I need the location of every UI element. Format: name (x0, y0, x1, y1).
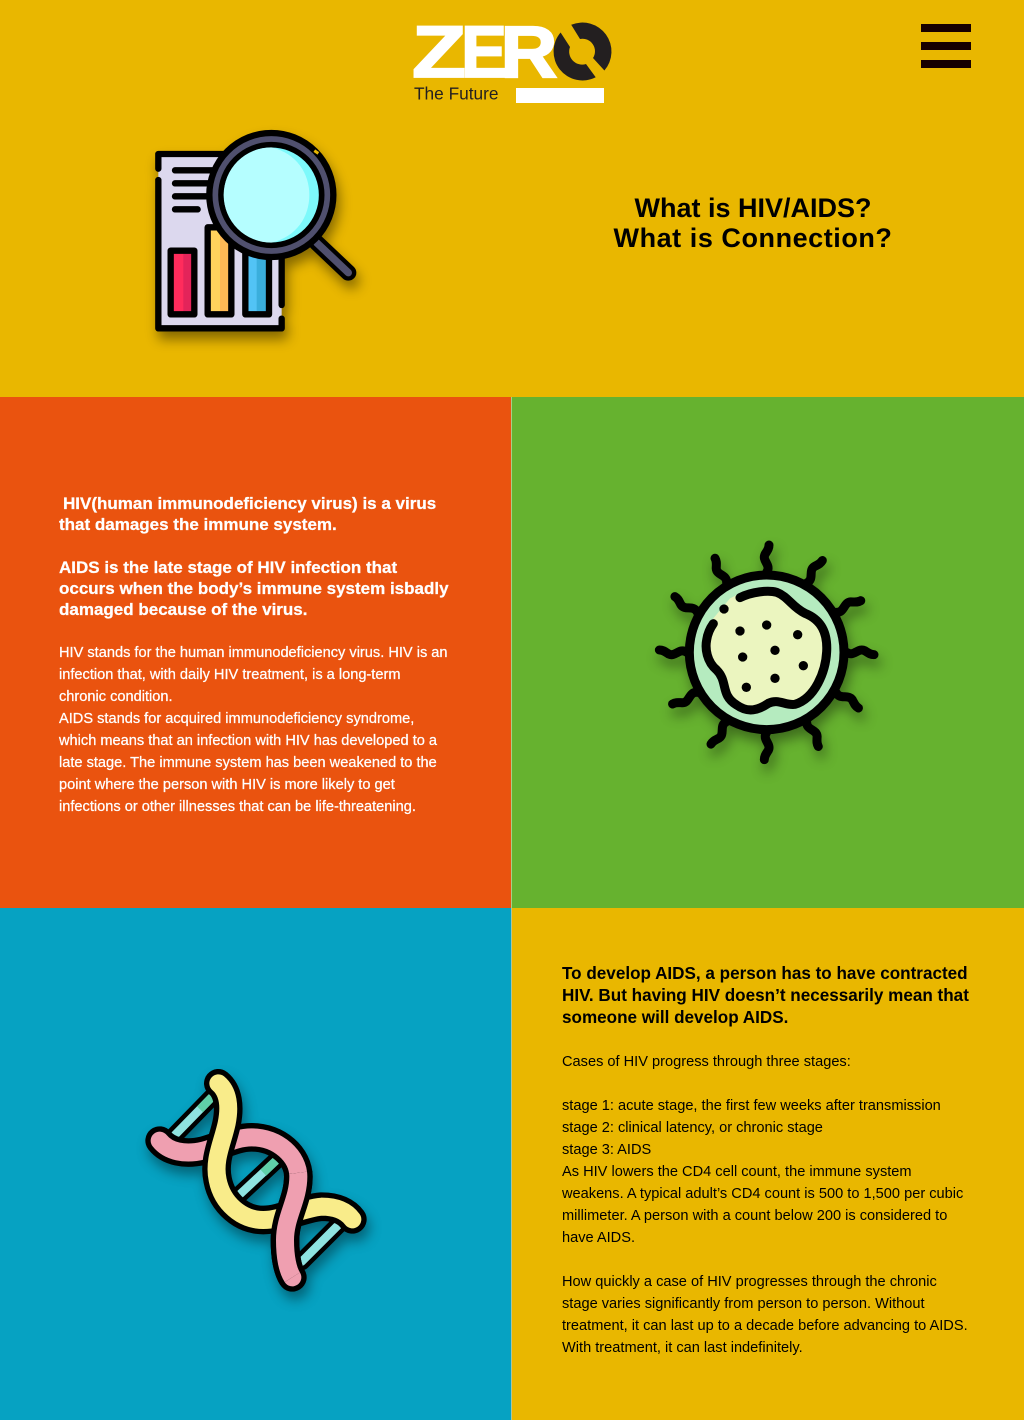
text: HIV and AIDS explanation: infections or other illnesses that can be life-threatening. (59, 799, 416, 815)
text: key definitions: AIDS is the late stage of HIV infection that (59, 558, 397, 576)
heading: What is HIV/AIDS? (634, 193, 872, 223)
icon: DNA helix (142, 1069, 376, 1306)
text: HIV and AIDS explanation: chronic condition. (59, 689, 173, 705)
text: stages of HIV: As HIV lowers the CD4 cell count, the immune system (562, 1164, 912, 1180)
text: progression lead: HIV. But having HIV doesn’t necessarily mean that (562, 986, 969, 1005)
logo: ZERO The Future: Z (412, 12, 466, 93)
text: stages of HIV: treatment, it can last up to a decade before advancing to AIDS. (562, 1318, 968, 1334)
panel: progression (511, 908, 1024, 1420)
icon: document with magnifying glass (150, 130, 366, 348)
text: stages of HIV: How quickly a case of HIV progresses through the chronic (562, 1274, 937, 1290)
text: stages of HIV (562, 1054, 968, 1356)
text: key definitions: HIV(human immunodeficiency virus) is a virus (63, 494, 436, 512)
text: progression lead: To develop AIDS, a person has to have contracted (562, 964, 968, 983)
text: HIV and AIDS explanation: AIDS stands for acquired immunodeficiency syndrome, (59, 711, 414, 727)
text: HIV and AIDS explanation: point where the person with HIV is more likely to get (59, 777, 395, 793)
text: stages of HIV: millimeter. A person with a count below 200 is considered to (562, 1208, 947, 1224)
panel: definitions (0, 397, 511, 908)
logo: ZERO The Future: E (461, 12, 507, 93)
text: stages of HIV: have AIDS. (562, 1230, 635, 1246)
text: key definitions: damaged because of the virus. (59, 600, 307, 618)
panel: header (0, 0, 1024, 397)
text: HIV and AIDS explanation: HIV stands for the human immunodeficiency virus. HIV is an (59, 645, 448, 661)
heading (614, 193, 892, 253)
panel: DNA (0, 908, 511, 1420)
text: stages of HIV: weakens. A typical adult’s CD4 count is 500 to 1,500 per cubic (562, 1186, 963, 1202)
heading: What is Connection? (614, 223, 892, 253)
text: HIV and AIDS explanation: infection that, with daily HIV treatment, is a long-term (59, 667, 400, 683)
text: stages of HIV: With treatment, it can last indefinitely. (562, 1340, 803, 1356)
text: HIV and AIDS explanation: which means that an infection with HIV has developed to a (59, 733, 437, 749)
text: key definitions: that damages the immune system. (59, 515, 337, 534)
text: progression lead (562, 964, 969, 1027)
text: HIV and AIDS explanation: late stage. The immune system has been weakened to the (59, 755, 437, 771)
logo: ZERO The Future: The Future (414, 84, 499, 104)
logo: ZERO The Future: R (500, 12, 558, 93)
icon: virus (654, 540, 886, 776)
text: stages of HIV: stage 2: clinical latency, or chronic stage (562, 1120, 823, 1136)
icon: menu (921, 24, 971, 68)
text: key definitions (59, 494, 449, 619)
text: key definitions: occurs when the body’s immune system isbadly (59, 578, 449, 598)
text: stages of HIV: stage 1: acute stage, the first few weeks after transmission (562, 1098, 941, 1114)
panel: virus (511, 397, 1024, 908)
text: stages of HIV: Cases of HIV progress through three stages: (562, 1054, 851, 1070)
text: progression lead: someone will develop AIDS. (562, 1008, 788, 1027)
logo: ZERO The Future (412, 12, 612, 104)
text: HIV and AIDS explanation (58, 645, 448, 815)
text: stages of HIV: stage 3: AIDS (562, 1142, 651, 1158)
text: stages of HIV: stage varies significantly from person to person. Without (562, 1296, 925, 1312)
